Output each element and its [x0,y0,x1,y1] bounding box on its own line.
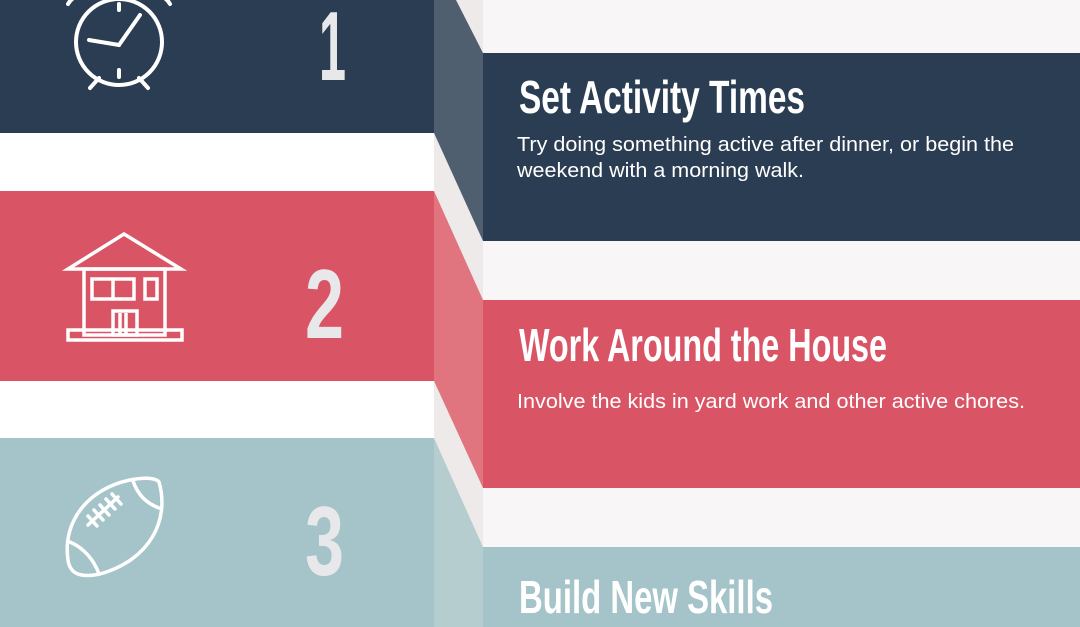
number 2: 2 [305,249,344,359]
connector 1 [434,0,483,241]
panel: step 2 content [483,300,1080,488]
panel: step 1 content [483,53,1080,241]
panel: step 2 left [0,191,434,381]
panel: step 1 left [0,0,434,133]
panel: step 1 content: weekend with a morning walk. [516,160,804,182]
heading 3: Build New Skills [519,571,773,623]
connector 3 [434,438,483,627]
panel: step 3 content [483,547,1080,627]
icon: house [68,234,182,340]
icon: football [67,478,162,575]
connector 2 [434,191,483,488]
panel: step 3 left [0,438,434,627]
text 1: Try doing something active after dinner, or begin the [517,134,1014,156]
heading 1: Set Activity Times [519,71,805,123]
heading 2: Work Around the House [519,319,887,371]
number 3: 3 [305,486,344,596]
icon: alarm clock [68,0,170,88]
text 2: Involve the kids in yard work and other active chores. [517,391,1025,413]
